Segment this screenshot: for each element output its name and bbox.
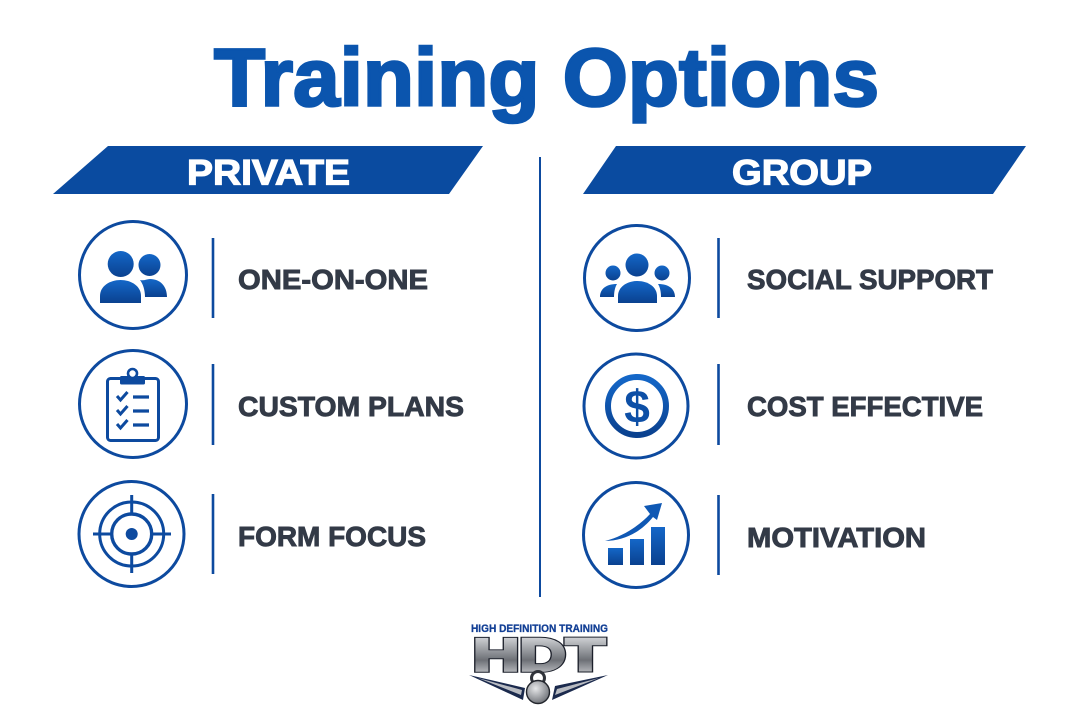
label: custom plans: CUSTOM PLANS <box>238 391 464 422</box>
item divider <box>717 495 720 575</box>
icon: two people <box>80 222 186 328</box>
logo kettlebell <box>526 672 550 704</box>
item divider <box>212 364 214 445</box>
banner: private <box>53 146 483 194</box>
title: Training Options <box>214 32 879 124</box>
logo: HDT <box>469 623 608 704</box>
label: motivation: MOTIVATION <box>747 522 926 553</box>
icon: three people <box>584 226 690 330</box>
banner: group <box>583 146 1026 194</box>
logo letters: HDT <box>473 630 605 680</box>
panel: private <box>53 146 483 586</box>
item divider <box>717 364 720 445</box>
icon: clipboard <box>80 350 186 458</box>
banner: group: GROUP <box>732 154 872 192</box>
label: cost effective: COST EFFECTIVE <box>747 391 983 422</box>
item divider <box>212 238 214 318</box>
logo wings <box>469 675 608 700</box>
label: form focus: FORM FOCUS <box>238 521 426 552</box>
icon: target <box>79 482 184 586</box>
label: one-on-one: ONE-ON-ONE <box>238 264 428 295</box>
panel: group <box>583 146 1026 588</box>
icon: growth chart <box>584 482 688 588</box>
banner: private: PRIVATE <box>187 154 350 192</box>
logo letters: HDT <box>473 630 605 680</box>
logo tagline: HIGH DEFINITION TRAINING <box>471 623 608 635</box>
center divider <box>539 157 541 597</box>
item divider <box>212 494 214 574</box>
icon: dollar coin <box>584 354 688 458</box>
item divider <box>717 238 720 318</box>
label: social support: SOCIAL SUPPORT <box>747 264 993 295</box>
icon: dollar coin: $ <box>624 380 650 432</box>
